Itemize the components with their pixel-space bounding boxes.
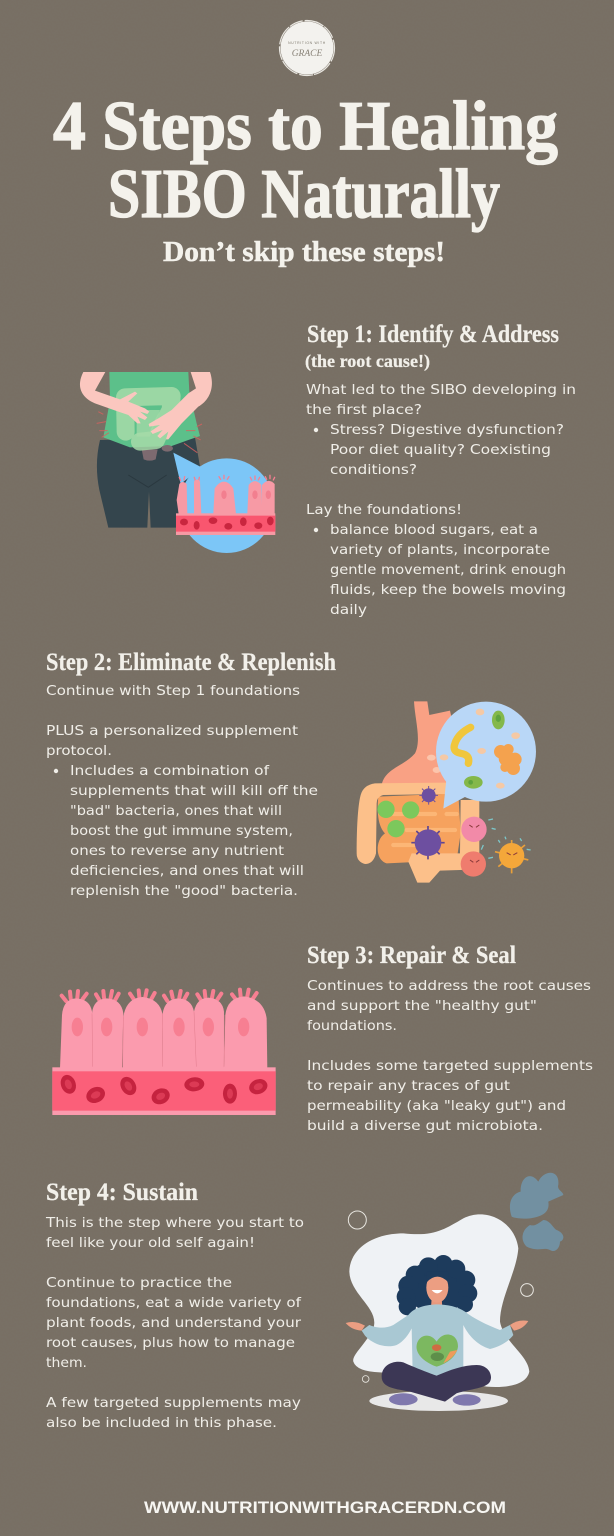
- illustration: abdomen pain and gut lining: [80, 372, 275, 553]
- text block: step 4 body: root causes, plus how to manage: [46, 1335, 295, 1351]
- text block: step 3 body: permeability (aka "leaky gut") and: [307, 1098, 566, 1114]
- text block: step 2 body: supplements that will kill off the: [70, 783, 318, 799]
- logo: Nutrition with Grace: NUTRITION WITH: [288, 41, 326, 45]
- logo: Nutrition with Grace: [280, 20, 334, 76]
- text block: step 4 body: foundations, eat a wide variety of: [46, 1295, 302, 1311]
- text block: step 1 body: Lay the foundations!: [306, 502, 462, 518]
- text block: step 2 body: deficiencies, and ones that will: [70, 863, 304, 879]
- text block: step 4 body: This is the step where you start to: [45, 1215, 304, 1231]
- panel: step 4: [45, 1173, 563, 1431]
- text block: step 1 body: What led to the SIBO developing in: [306, 382, 576, 398]
- heading: step 4: Step 4: Sustain: [46, 1179, 198, 1206]
- text block: step 1 body: conditions?: [330, 462, 417, 478]
- text block: step 1 body: variety of plants, incorporate: [330, 542, 550, 558]
- text block: step 3 body: to repair any traces of gut: [307, 1078, 510, 1094]
- text block: step 1 body: the first place?: [306, 402, 422, 418]
- text block: step 3 body: Continues to address the root causes: [307, 978, 591, 994]
- illustration: digestive tract with bacteria: [357, 701, 536, 883]
- panel: step 1: [80, 321, 576, 618]
- text block: step 4 body: [45, 1215, 304, 1431]
- text block: step 2 body: replenish the "good" bacteria.: [70, 883, 298, 899]
- text block: step 2 body: PLUS a personalized supplement: [46, 723, 298, 739]
- text block: step 1 body: daily: [330, 602, 367, 618]
- title: 4 Steps to Healing: [53, 88, 558, 165]
- text block: step 4 body: also be included in this phase.: [46, 1415, 277, 1431]
- heading: step 3: Step 3: Repair & Seal: [307, 942, 516, 969]
- text block: step 1 body: Poor diet quality? Coexisting: [330, 442, 551, 458]
- heading: step 2: Step 2: Eliminate & Replenish: [46, 649, 336, 676]
- text block: step 4 body: plant foods, and understand your: [46, 1315, 301, 1331]
- title: [53, 88, 558, 233]
- heading: step 1: Step 1: Identify & Address: [307, 321, 559, 348]
- text block: step 2 body: ones to reverse any nutrient: [70, 843, 284, 859]
- text block: step 2 body: boost the gut immune system,: [70, 823, 293, 839]
- illustration: meditating woman with healthy gut: [346, 1173, 563, 1411]
- panel: step 3: [52, 942, 593, 1134]
- text block: step 2 body: Includes a combination of: [70, 763, 270, 779]
- text block: step 3 body: Includes some targeted supplements: [307, 1058, 593, 1074]
- text block: step 3 body: and support the "healthy gut": [307, 998, 537, 1014]
- text block: step 1 body: [306, 382, 576, 618]
- text block: step 4 body: Continue to practice the: [46, 1275, 232, 1291]
- illustration: gut lining cells: [52, 990, 276, 1115]
- text block: step 2 body: Continue with Step 1 foundations: [46, 683, 300, 699]
- subheading: the root cause: (the root cause!): [305, 351, 430, 372]
- text block: step 1 body: fluids, keep the bowels moving: [330, 582, 566, 598]
- text block: step 3 body: foundations.: [307, 1018, 397, 1034]
- text block: step 4 body: them.: [46, 1355, 87, 1371]
- text block: step 3 body: [307, 978, 593, 1134]
- text block: step 1 body: Stress? Digestive dysfunction?: [330, 422, 564, 438]
- text block: step 1 body: gentle movement, drink enough: [330, 562, 566, 578]
- logo: Nutrition with Grace: GRACE: [292, 49, 322, 59]
- text block: step 2 body: [46, 683, 318, 899]
- footer: website: WWW.NUTRITIONWITHGRACERDN.COM: [144, 1499, 506, 1517]
- text block: step 4 body: A few targeted supplements may: [46, 1395, 301, 1411]
- text block: step 4 body: feel like your old self again!: [46, 1235, 255, 1251]
- text block: step 3 body: build a diverse gut microbiota.: [307, 1118, 543, 1134]
- text block: step 2 body: protocol.: [46, 743, 112, 759]
- title: SIBO Naturally: [108, 156, 500, 233]
- subtitle: Don’t skip these steps!: [163, 236, 445, 268]
- text block: step 1 body: balance blood sugars, eat a: [330, 522, 538, 538]
- text block: step 2 body: "bad" bacteria, ones that will: [70, 803, 282, 819]
- panel: step 2: [46, 649, 536, 899]
